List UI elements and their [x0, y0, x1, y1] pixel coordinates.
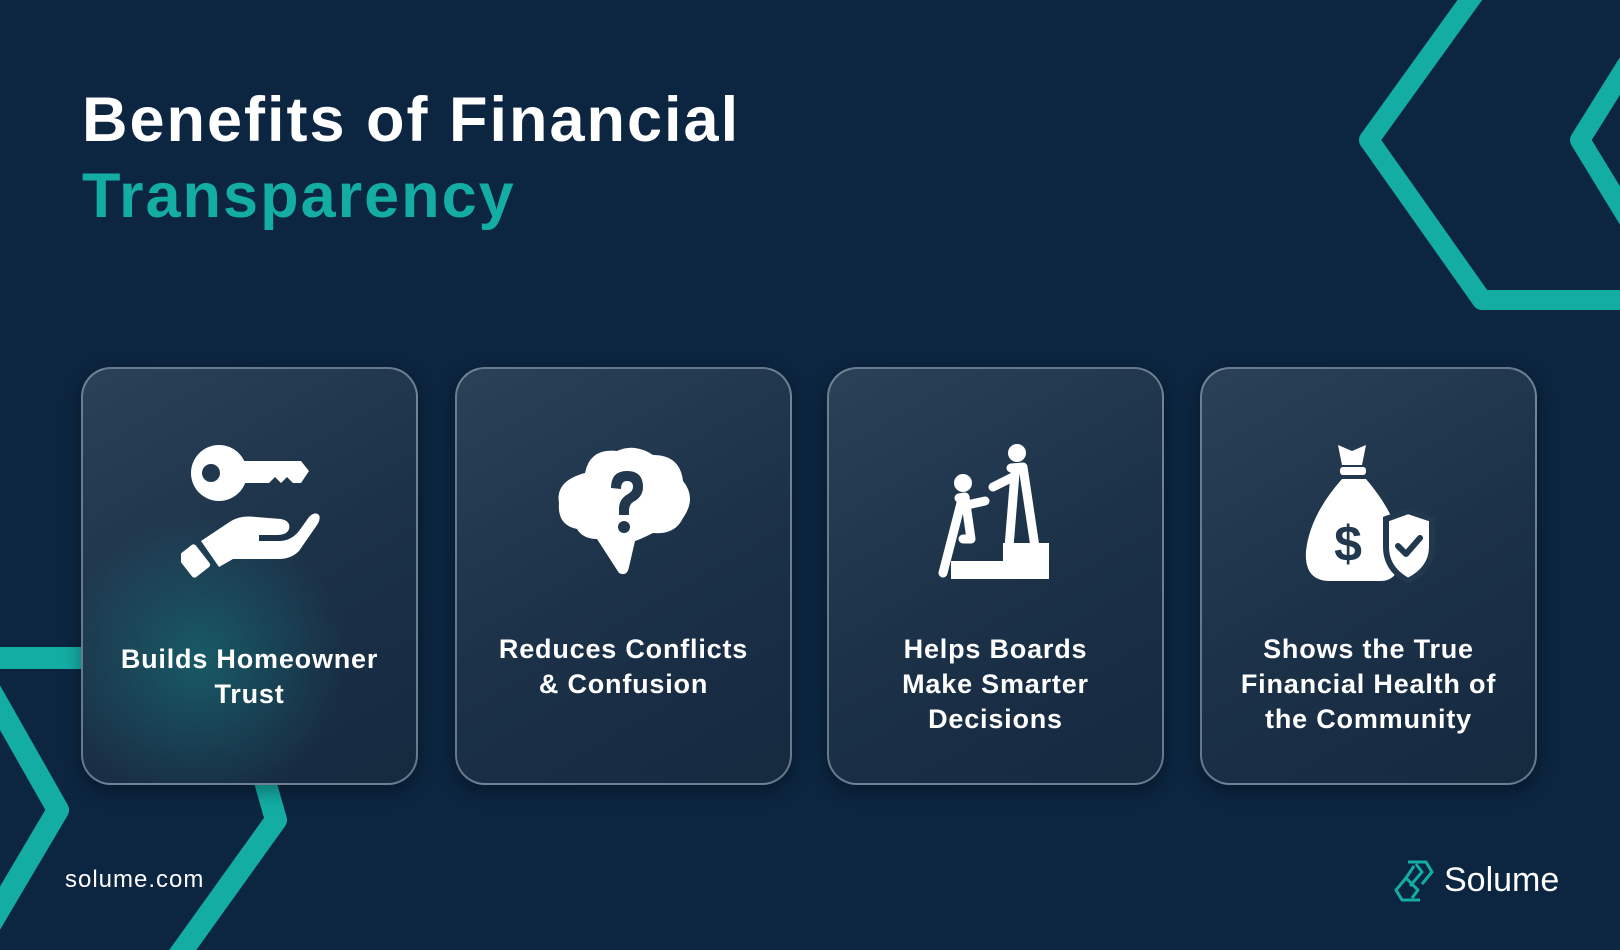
label: [499, 634, 748, 699]
logo: Solume: [1444, 861, 1559, 899]
card: builds trust: [81, 367, 418, 785]
label: Decisions: [928, 704, 1063, 734]
icon: money bag with shield: $: [1334, 516, 1362, 572]
card: reduces conflicts: [455, 367, 792, 785]
label: [1241, 634, 1496, 734]
label: Financial Health of: [1241, 669, 1496, 699]
icon: key in hand: [181, 445, 320, 578]
label: [121, 644, 378, 709]
label: Shows the True: [1263, 634, 1474, 664]
logo: [1394, 860, 1559, 902]
label: Helps Boards: [904, 634, 1087, 664]
label: Make Smarter: [902, 669, 1089, 699]
label: & Confusion: [539, 669, 708, 699]
icon: helping up stairs: [938, 444, 1049, 579]
title: Transparency: [82, 161, 516, 231]
label: [902, 634, 1089, 734]
label: the Community: [1265, 704, 1472, 734]
label: Builds Homeowner: [121, 644, 378, 674]
icon: brain with question mark: [558, 448, 690, 574]
icon: logo mark: [1394, 860, 1434, 902]
card: financial health: [1200, 367, 1537, 785]
icon: money bag with shield: [1306, 445, 1429, 581]
label: Trust: [214, 679, 284, 709]
card: smarter decisions: [827, 367, 1164, 785]
title: [82, 85, 740, 231]
label: Reduces Conflicts: [499, 634, 748, 664]
footer url: solume.com: [65, 866, 204, 893]
title: Benefits of Financial: [82, 85, 740, 155]
